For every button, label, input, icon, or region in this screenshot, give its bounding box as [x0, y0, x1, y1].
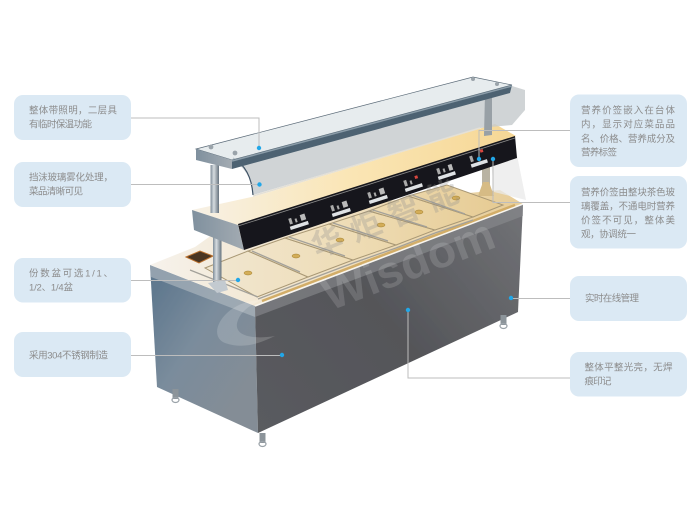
leader lines: [131, 118, 570, 378]
counter left face: [150, 265, 258, 433]
callout: tea glass cover: 璃覆盖，不通电时营养: [581, 200, 675, 212]
callout: sneeze glass: 挡沫玻璃雾化处理，: [29, 172, 113, 184]
black nutrition panel: [238, 136, 517, 250]
callout: online management: [570, 276, 687, 321]
right post lower: [478, 160, 494, 196]
callout: embedded nutrition label: 营养标签: [581, 146, 617, 158]
right post upper: [484, 91, 492, 136]
upper left post: [210, 165, 219, 213]
right rear glass: [490, 150, 526, 200]
callout: pan sizes: [14, 258, 131, 302]
callout: sneeze glass: 菜品清晰可见: [29, 186, 83, 198]
callout: tea glass cover: 营养价签由整块茶色玻: [581, 186, 675, 198]
curved sneeze glass: [232, 86, 525, 196]
counter lip: [150, 265, 255, 317]
nutrition labels: [287, 149, 488, 230]
callout: tea glass cover: 价签不可见，整体美: [581, 214, 675, 226]
callout: embedded nutrition label: 内，显示对应菜品品: [581, 118, 675, 130]
callout: stainless steel: 采用304不锈钢制造: [29, 350, 108, 362]
lower left post: [208, 230, 228, 293]
middle shelf end: [192, 210, 244, 250]
callout: embedded nutrition label: 营养价签嵌入在台体: [581, 104, 675, 116]
pan knobs: [244, 196, 460, 275]
callout: pan sizes: 1/2、1/4盆: [29, 282, 73, 294]
callout: stainless steel: [14, 332, 131, 377]
counter top surface: [150, 190, 523, 306]
upper glass shelf: [196, 77, 512, 160]
callout: embedded nutrition label: [570, 94, 687, 167]
food pans: [205, 185, 503, 297]
callout: lighting: [14, 95, 131, 140]
callout: sneeze glass: [14, 162, 131, 207]
pan rails: [190, 195, 473, 299]
shelf lit surface: [192, 124, 516, 225]
watermark: Wisdom: [315, 208, 502, 320]
callout: flat finish: 痕印记: [584, 376, 612, 388]
glass bolts: [209, 77, 499, 155]
counter front face: [255, 204, 523, 433]
callout: lighting: 有临时保温功能: [29, 118, 92, 130]
upper shelf bar: [232, 85, 512, 169]
callout: flat finish: 整体平整光亮，无焊: [584, 362, 673, 374]
callout: tea glass cover: 观，协调统一: [581, 228, 636, 240]
control display on counter: [186, 251, 213, 263]
callout: lighting: 整体带照明，二层具: [29, 104, 117, 116]
counter legs: [172, 315, 507, 446]
callout: embedded nutrition label: 名、价格、营养成分及: [581, 133, 675, 145]
watermark: 华炬智能: [307, 174, 463, 264]
callout: pan sizes: 份数盆可选1/1、: [29, 268, 113, 280]
upper shelf end: [196, 149, 232, 169]
watermark: [217, 174, 502, 346]
callout dots: [236, 146, 513, 357]
callout: online management: 实时在线管理: [585, 292, 639, 304]
product: food counter: [150, 77, 526, 446]
callout: tea glass cover: [570, 176, 687, 248]
callout: flat finish: [570, 352, 687, 396]
